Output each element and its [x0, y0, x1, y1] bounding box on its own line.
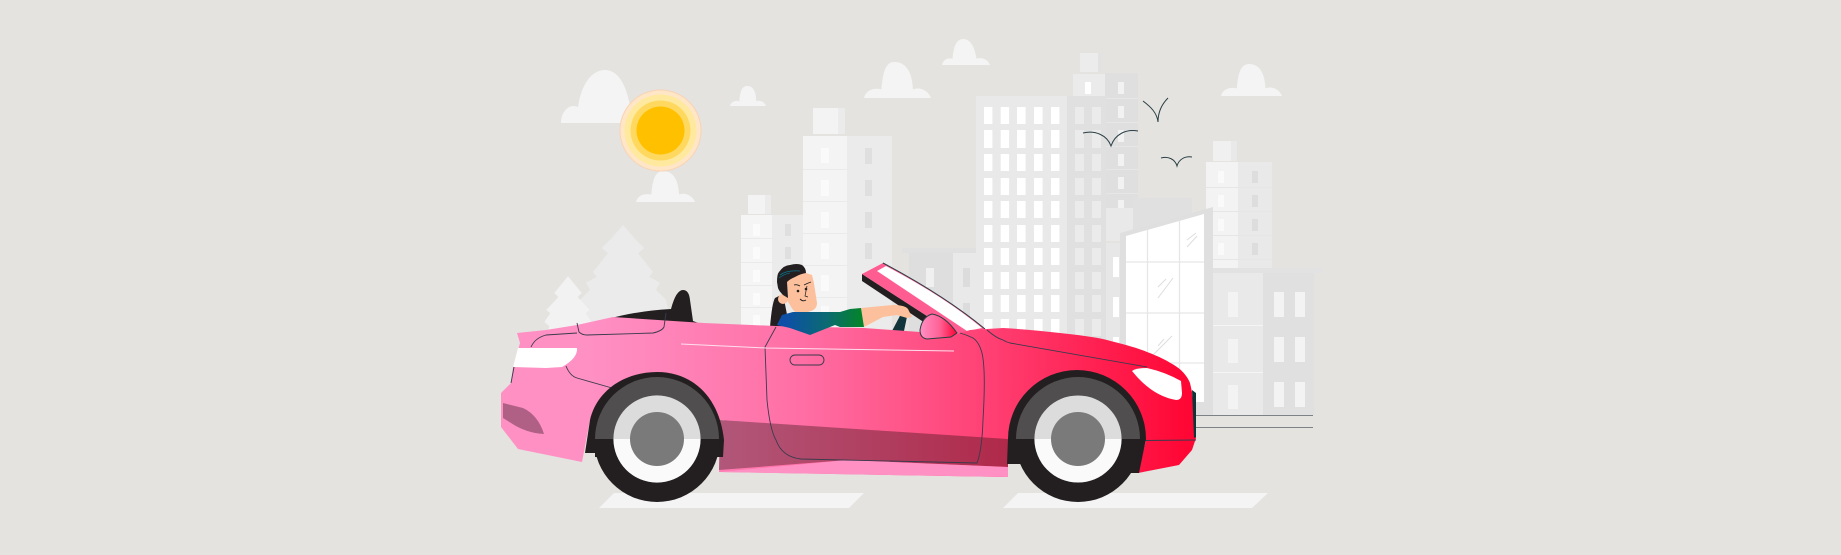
- tree: large: [574, 226, 672, 325]
- windscreen: [862, 263, 985, 337]
- cloud: upper centre: [942, 39, 990, 65]
- building: glass tower: [1120, 207, 1213, 415]
- steering wheel: [892, 310, 908, 331]
- building: low block behind windscreen: [902, 248, 976, 343]
- tree: small: [545, 277, 591, 336]
- driver: [777, 264, 912, 335]
- seat: [770, 294, 790, 330]
- cloud: centre: [864, 62, 931, 98]
- cloud: under sun: [636, 171, 695, 202]
- building: upper right tower: [1206, 141, 1272, 270]
- belt line highlight: [681, 344, 954, 351]
- body panel lines: [511, 313, 1196, 463]
- sun: [620, 90, 701, 171]
- road stripe: front: [1003, 493, 1268, 508]
- road lines: [1193, 416, 1313, 428]
- side sill strip: [719, 460, 1008, 477]
- building: left small tower: [741, 195, 805, 335]
- side mirror: [920, 314, 957, 339]
- front headlight: [1132, 368, 1182, 400]
- building: top spire of tall tower: [1073, 53, 1138, 208]
- folded roof: [608, 290, 704, 325]
- front bumper edge: [1192, 390, 1196, 438]
- cloud: small: [730, 86, 766, 106]
- rear vent: [503, 403, 544, 434]
- building: block behind glass tower: [1106, 198, 1192, 353]
- rear headlight: [513, 348, 577, 368]
- road stripe: rear: [599, 493, 864, 508]
- building: lower right block: [1208, 268, 1323, 415]
- cloud: right: [1221, 64, 1282, 96]
- birds: [1083, 98, 1192, 166]
- cloud: top left: [561, 70, 632, 123]
- front wheel: [1007, 370, 1146, 502]
- rear wheel: [585, 372, 724, 502]
- building: tall left tower: [803, 108, 892, 332]
- car body: [501, 317, 1196, 477]
- side sill shadow: [719, 420, 1008, 470]
- building: main tower with white windows: [976, 96, 1106, 346]
